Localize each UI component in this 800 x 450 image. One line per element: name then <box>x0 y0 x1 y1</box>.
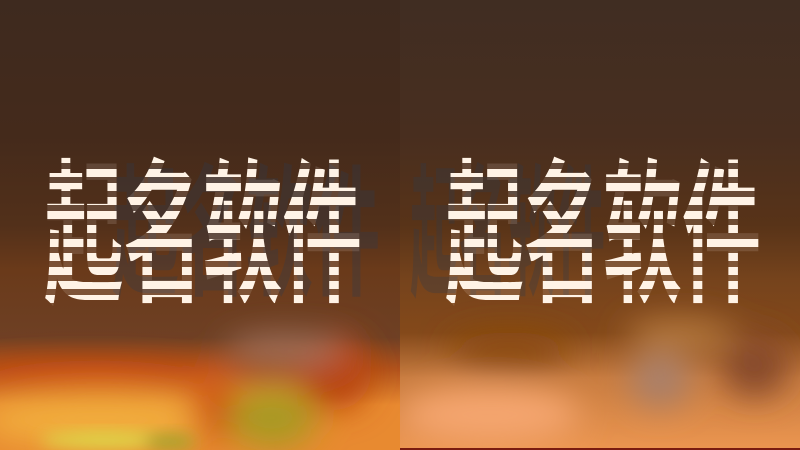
background: right panel <box>400 102 800 448</box>
background: left panel <box>0 149 400 450</box>
shadow title: right: 起名软件 <box>410 155 605 315</box>
title: left: 起名软件 <box>44 150 362 324</box>
bottom red strip <box>400 448 800 450</box>
poster <box>0 102 800 450</box>
title: right: 起名软件 <box>445 150 761 324</box>
shadow title: left: 起名软件 <box>112 155 380 315</box>
